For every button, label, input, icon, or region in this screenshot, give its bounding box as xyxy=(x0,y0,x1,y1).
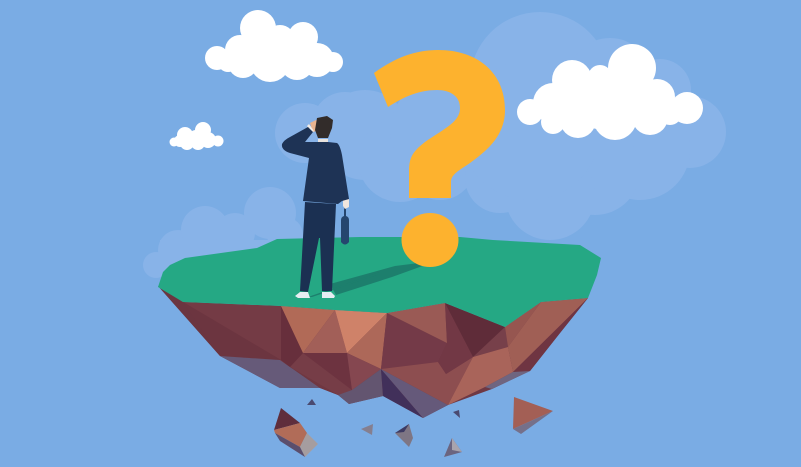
facet: dark fold xyxy=(438,303,473,374)
facet: strip shadow xyxy=(281,360,338,395)
rock silhouette xyxy=(158,286,588,418)
facet: purple dark xyxy=(381,369,423,418)
trousers xyxy=(300,202,336,292)
facet: left dark xyxy=(183,302,281,360)
jacket xyxy=(282,127,349,204)
facet: lower strip xyxy=(220,353,352,395)
raised hand xyxy=(310,120,320,132)
background cloud: large right xyxy=(275,12,726,240)
facet: salmon left xyxy=(281,306,335,353)
facet: grey right of tip xyxy=(381,369,448,418)
facet: salmon right xyxy=(347,313,387,369)
facet: small maroon right xyxy=(473,327,508,357)
shirt cuff and hand xyxy=(343,199,349,209)
briefcase xyxy=(341,207,349,244)
cloud: small white xyxy=(170,122,224,150)
head and hair xyxy=(315,116,333,138)
falling rock: small chips xyxy=(307,399,462,457)
facet: centre dark xyxy=(281,306,303,367)
rock underside of island xyxy=(158,286,588,418)
businessman xyxy=(282,116,349,298)
background cloud: lower left xyxy=(143,187,303,278)
facet: centre maroon xyxy=(303,353,352,390)
shoes xyxy=(295,292,335,298)
facet: maroon centre right xyxy=(381,313,447,369)
cloud: right white xyxy=(517,44,703,140)
cloud: top left white xyxy=(205,10,343,82)
facet: salmon mid xyxy=(303,310,347,353)
facet: brown right xyxy=(505,302,541,347)
facet: left large xyxy=(183,302,281,360)
facet: grey lower centre xyxy=(338,369,383,404)
question mark xyxy=(374,50,505,267)
facet: underside grey left xyxy=(220,356,320,388)
island grass top xyxy=(158,237,601,327)
falling rock: large left xyxy=(274,408,318,457)
facet: small maroon xyxy=(347,353,381,390)
falling rock: large right xyxy=(513,397,553,434)
facet: left outer sliver xyxy=(158,286,220,356)
facet: lower brown xyxy=(381,357,473,405)
facet: salmon lower right xyxy=(448,347,513,405)
facet: grey right underside xyxy=(485,371,530,389)
facet: light salmon xyxy=(335,310,387,353)
raised cuff xyxy=(307,124,314,133)
facet: dark right edge xyxy=(513,298,588,372)
man's shadow xyxy=(308,262,428,297)
facet: top brown xyxy=(387,303,447,343)
collar xyxy=(318,139,328,142)
facet: large brown right xyxy=(508,298,588,372)
facet: dark top right xyxy=(445,303,505,357)
